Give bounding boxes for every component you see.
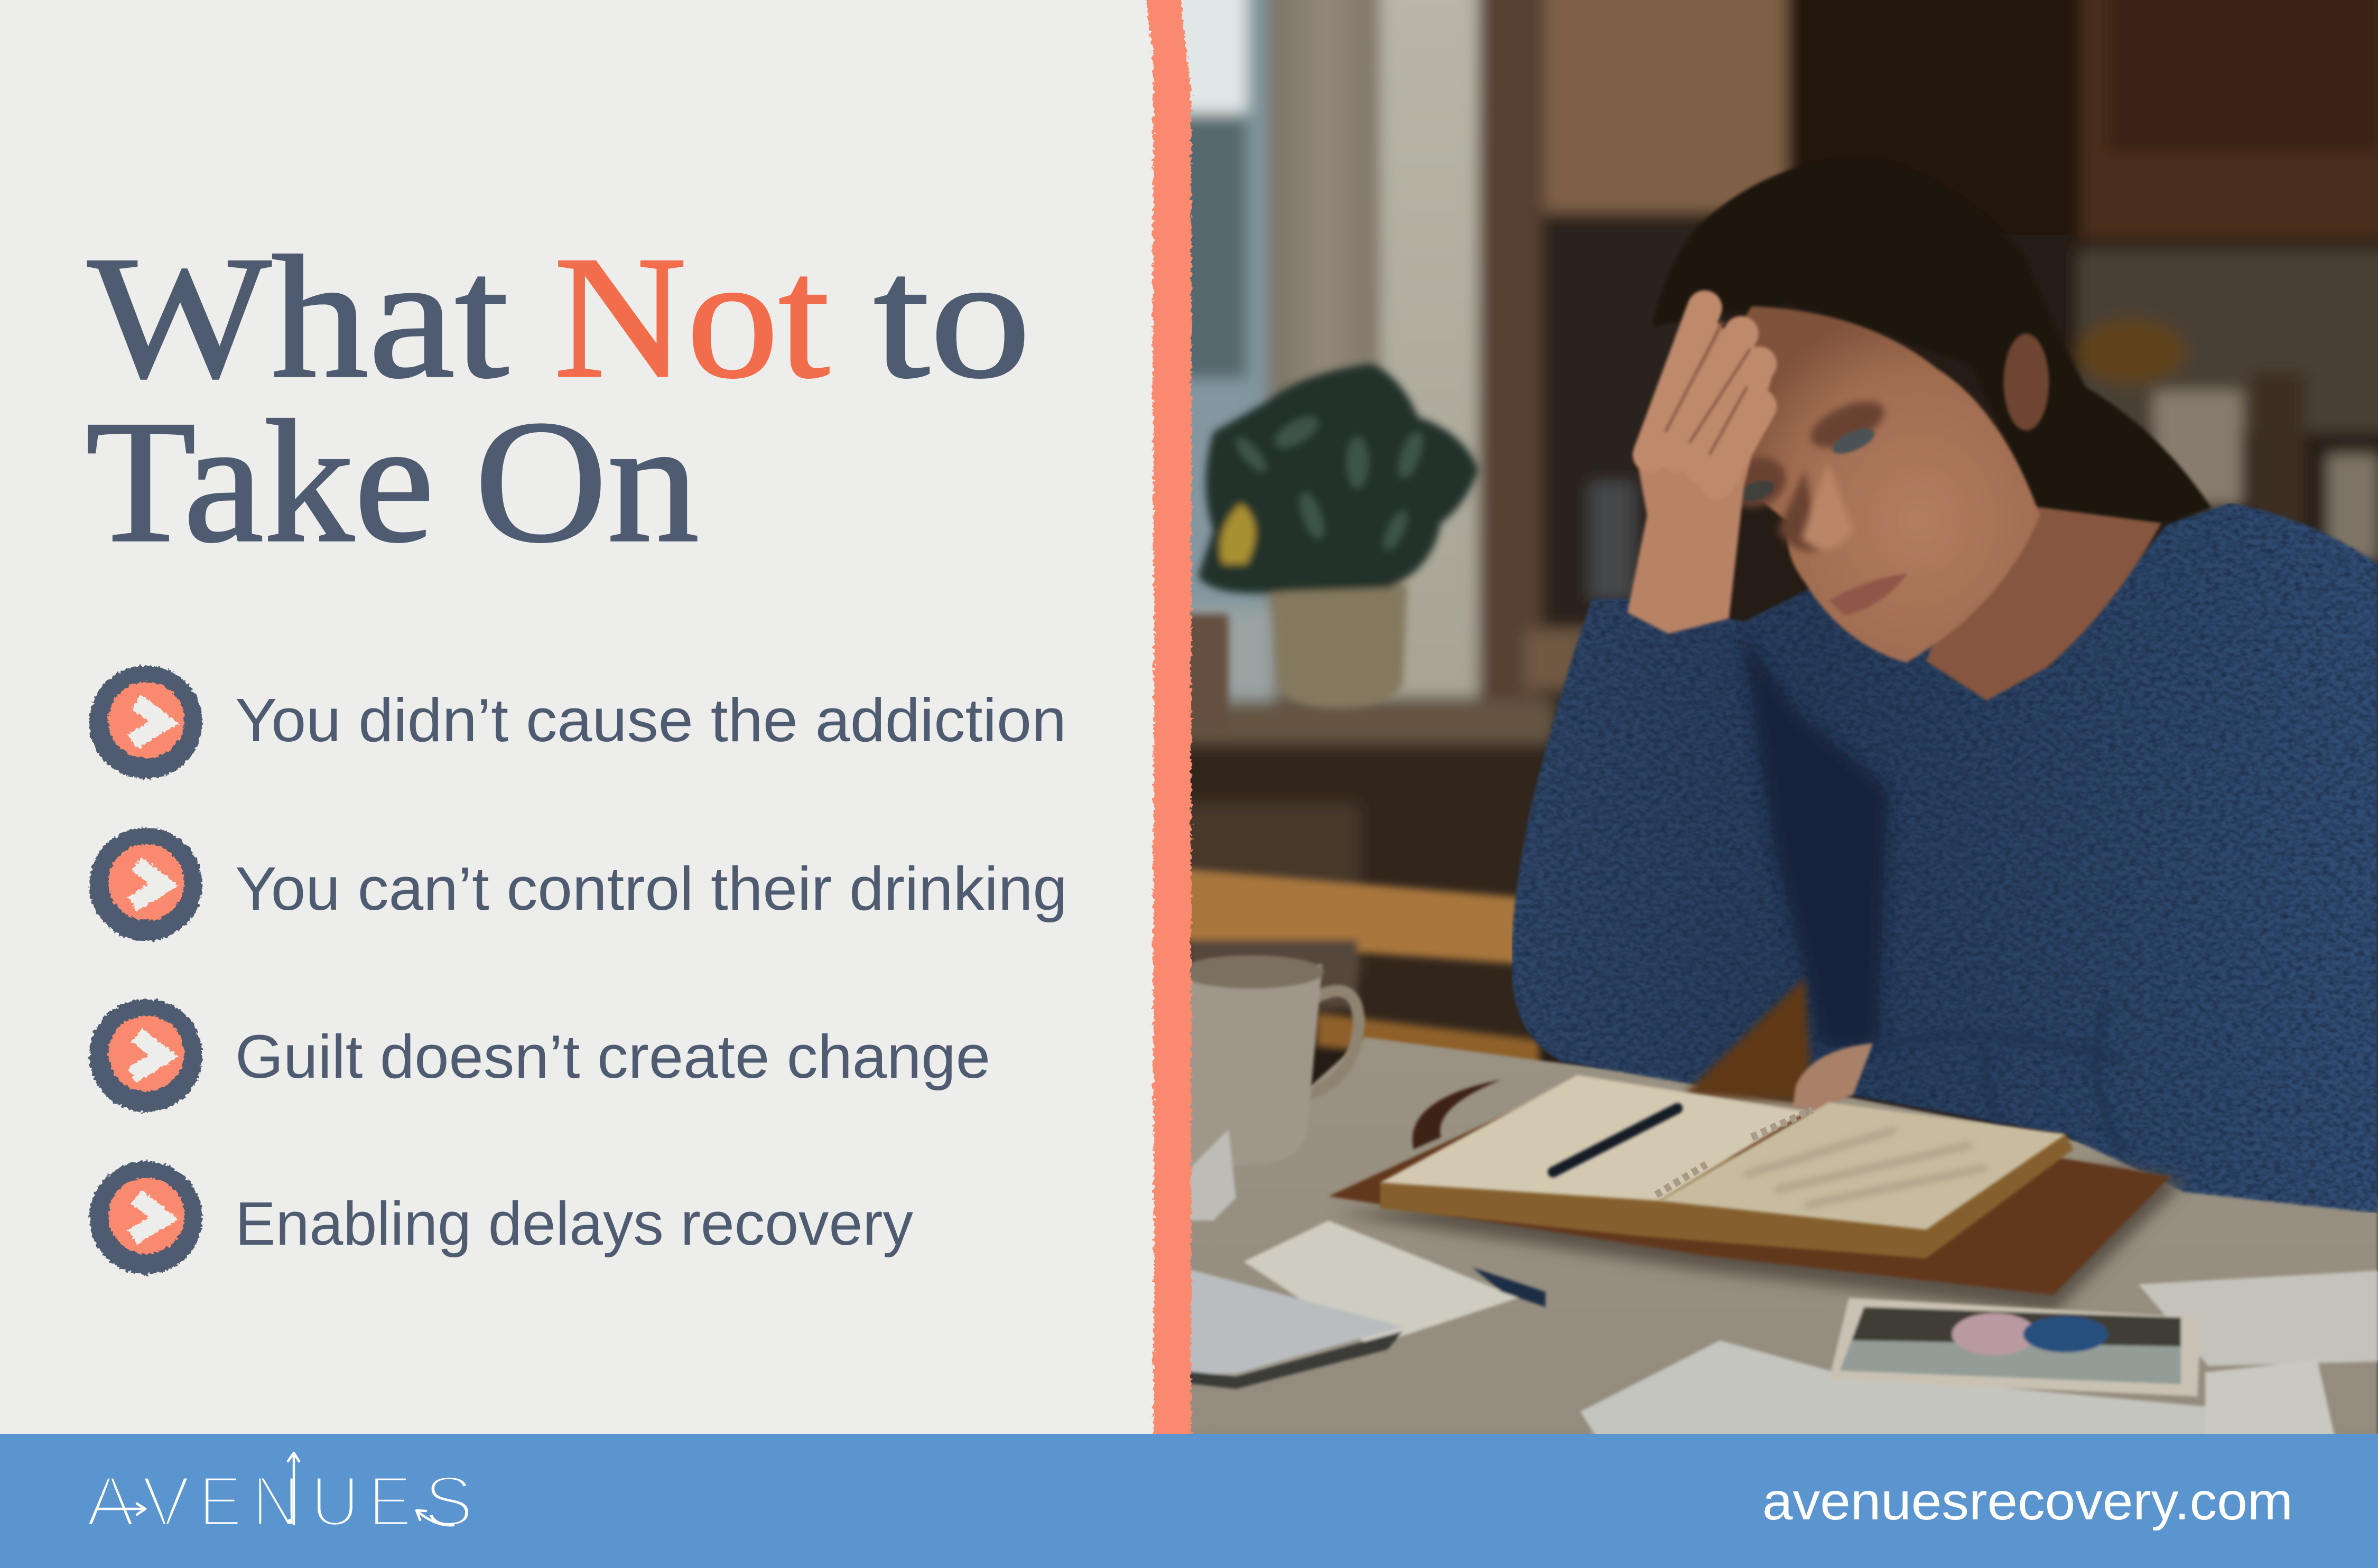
wrist hand — [1792, 1043, 1873, 1110]
list item 1 — [89, 666, 1066, 779]
logo: Avenues — [86, 1453, 473, 1541]
binder rings — [1656, 1110, 1813, 1195]
logo wordmark: S — [424, 1461, 473, 1541]
leather cover — [1329, 1098, 2170, 1295]
website url: avenuesrecovery.com — [1762, 1472, 2293, 1531]
page block — [1380, 1134, 2073, 1258]
right paper — [2139, 1271, 2378, 1366]
bottom paper — [1581, 1340, 2275, 1455]
handwriting — [1744, 1130, 1987, 1206]
stacked paper — [1183, 1267, 1403, 1374]
item text: Enabling delays recovery — [235, 1189, 913, 1258]
nose highlight — [1802, 462, 1853, 549]
eyes and mouth — [1736, 424, 1908, 615]
sweater — [1512, 503, 2378, 1213]
receipts — [1243, 1220, 1518, 1347]
logo wordmark: U — [311, 1461, 359, 1541]
item text: You didn’t cause the addiction — [235, 686, 1066, 754]
journal — [1329, 1075, 2184, 1313]
sweater shadow — [1741, 629, 1888, 1046]
list item 2 — [89, 828, 1067, 941]
footer bar — [0, 1434, 2378, 1568]
table top — [1183, 1037, 2378, 1455]
window plant — [1183, 364, 1479, 729]
photo: distressed woman at kitchen table — [1168, 0, 2378, 1486]
mug — [1178, 955, 1359, 1220]
face — [1720, 306, 2040, 662]
title word: What: What — [88, 220, 509, 414]
chair — [1183, 869, 1539, 1067]
logo wordmark: A — [86, 1461, 135, 1541]
logo arrows — [97, 1453, 453, 1525]
logo wordmark: V — [142, 1461, 190, 1541]
strap — [1413, 1079, 1501, 1149]
small paper — [2205, 1360, 2336, 1440]
icon: chevron badge — [89, 999, 202, 1112]
woman — [1512, 158, 2378, 1213]
left page — [1380, 1075, 1806, 1201]
left panel background — [0, 0, 1194, 1437]
logo wordmark: E — [368, 1461, 412, 1541]
item text: You can’t control their drinking — [235, 854, 1067, 923]
skin under arm — [1684, 978, 1813, 1104]
logo wordmark: E — [199, 1461, 242, 1541]
neck — [1926, 500, 2161, 701]
eye sockets — [1720, 392, 1891, 551]
sleeve folds — [1873, 1001, 2123, 1152]
hand on forehead — [1628, 308, 1771, 634]
pen — [1553, 1108, 1677, 1172]
icon: chevron badge — [89, 666, 202, 779]
icon: chevron badge — [89, 828, 202, 941]
title word: On: On — [475, 384, 699, 578]
kitchen background — [1168, 0, 2378, 1486]
title word: to: to — [874, 220, 1031, 414]
title word: Not: Not — [554, 220, 830, 414]
title — [86, 220, 1031, 578]
title word: Take: Take — [86, 384, 434, 578]
list item 3 — [89, 999, 990, 1112]
blue clip — [1473, 1267, 1546, 1307]
right page — [1659, 1102, 2066, 1230]
brush stripe divider — [1145, 0, 1192, 1448]
photograph — [1829, 1298, 2200, 1396]
papers on table — [1183, 1220, 2378, 1455]
logo wordmark — [86, 1461, 473, 1541]
icon: chevron badge — [89, 1161, 202, 1274]
logo wordmark: N — [252, 1461, 300, 1541]
hair — [1653, 158, 2211, 523]
ear — [2003, 333, 2049, 431]
shadow — [1335, 1168, 2184, 1313]
list item 4 — [89, 1161, 913, 1274]
item text: Guilt doesn’t create change — [235, 1022, 990, 1091]
